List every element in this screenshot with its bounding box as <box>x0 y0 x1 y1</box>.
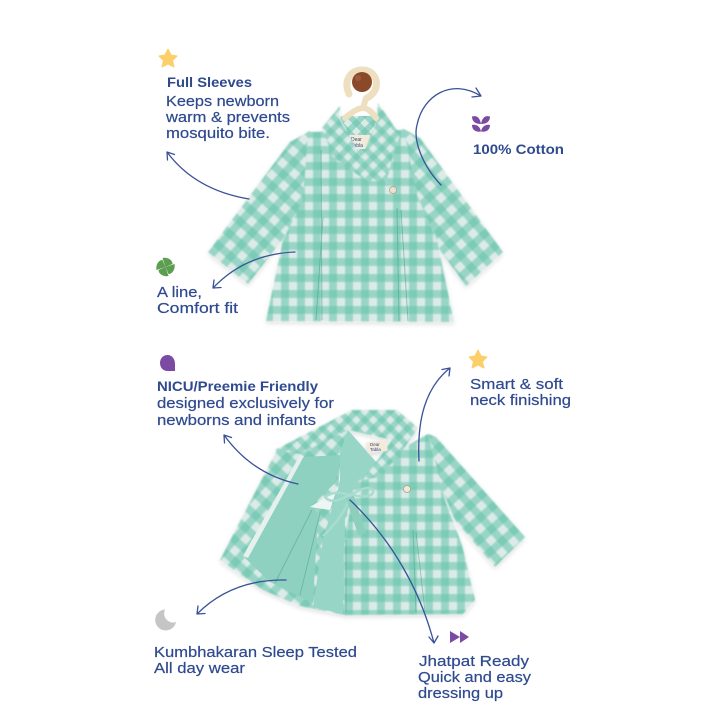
text: full sleeves: Full Sleeves <box>167 74 252 90</box>
text: full sleeves: warm & prevents <box>165 110 290 126</box>
right sleeve <box>428 434 525 567</box>
right sleeve <box>402 128 503 286</box>
text: jhatpat <box>418 654 532 702</box>
text: a line: A line, <box>157 285 202 301</box>
text: nicu: newborns and infants <box>157 413 316 429</box>
icon: purple drop <box>160 355 175 371</box>
text: neck finishing <box>470 377 571 409</box>
garment: lower jacket opened view <box>220 410 525 615</box>
left flap lining <box>245 455 342 603</box>
text: neck finishing: Smart & soft <box>470 377 563 393</box>
text: jhatpat: Jhatpat Ready <box>419 654 530 670</box>
arrow: jhatpat <box>350 500 438 643</box>
left collar lapel <box>322 106 387 183</box>
button <box>390 186 396 194</box>
arrow: a line <box>213 252 295 288</box>
outer front panel <box>344 434 475 615</box>
left sleeve <box>208 131 310 284</box>
arrow: nicu <box>224 435 298 484</box>
neck label: Tabla <box>370 447 381 452</box>
text: jhatpat: dressing up <box>418 686 503 702</box>
pleats <box>275 510 425 612</box>
neck label: Dear <box>351 137 362 143</box>
neck label: Tabla <box>351 143 363 149</box>
text: sleep <box>154 645 357 677</box>
arrow: neck <box>419 368 450 461</box>
text: a line <box>157 285 238 317</box>
left flap gingham <box>220 425 348 615</box>
bow tie <box>323 488 373 536</box>
neck label <box>366 440 388 453</box>
text: sleep: All day wear <box>154 661 245 677</box>
arrow: full sleeves <box>167 152 249 199</box>
text: cotton: 100% Cotton <box>473 141 564 157</box>
garment: upper jacket front view <box>208 103 503 322</box>
text: neck finishing: neck finishing <box>470 393 571 409</box>
arrow: sleep <box>197 580 286 614</box>
pleat lines <box>316 150 408 321</box>
white facing near tie <box>310 467 340 510</box>
icon: star neck <box>469 350 487 368</box>
text: jhatpat: Quick and easy <box>418 670 532 686</box>
centre inner lining <box>313 430 377 614</box>
white strip <box>243 455 304 558</box>
text: full sleeves <box>165 74 290 142</box>
icon: pinwheel <box>156 258 175 276</box>
hanger <box>345 70 376 118</box>
text: nicu: designed exclusively for <box>157 396 334 412</box>
text: nicu <box>157 378 334 429</box>
icon: fast forward <box>450 631 469 643</box>
right collar band <box>362 103 400 178</box>
arrow: cotton <box>416 88 481 185</box>
text: a line: Comfort fit <box>157 301 238 317</box>
neck label: Dear <box>370 442 380 447</box>
neck label <box>349 135 370 149</box>
neck interior <box>339 116 378 158</box>
jacket body <box>266 130 454 322</box>
text: full sleeves: mosquito bite. <box>166 126 270 142</box>
button <box>404 486 410 492</box>
collar <box>275 410 418 480</box>
text: full sleeves: Keeps newborn <box>166 94 279 110</box>
text: sleep: Kumbhakaran Sleep Tested <box>154 645 357 661</box>
text: nicu: NICU/Preemie Friendly <box>157 378 318 394</box>
icon: star full sleeves <box>159 49 177 67</box>
icon: moon <box>155 610 176 630</box>
icon: cotton leaves <box>472 116 490 132</box>
